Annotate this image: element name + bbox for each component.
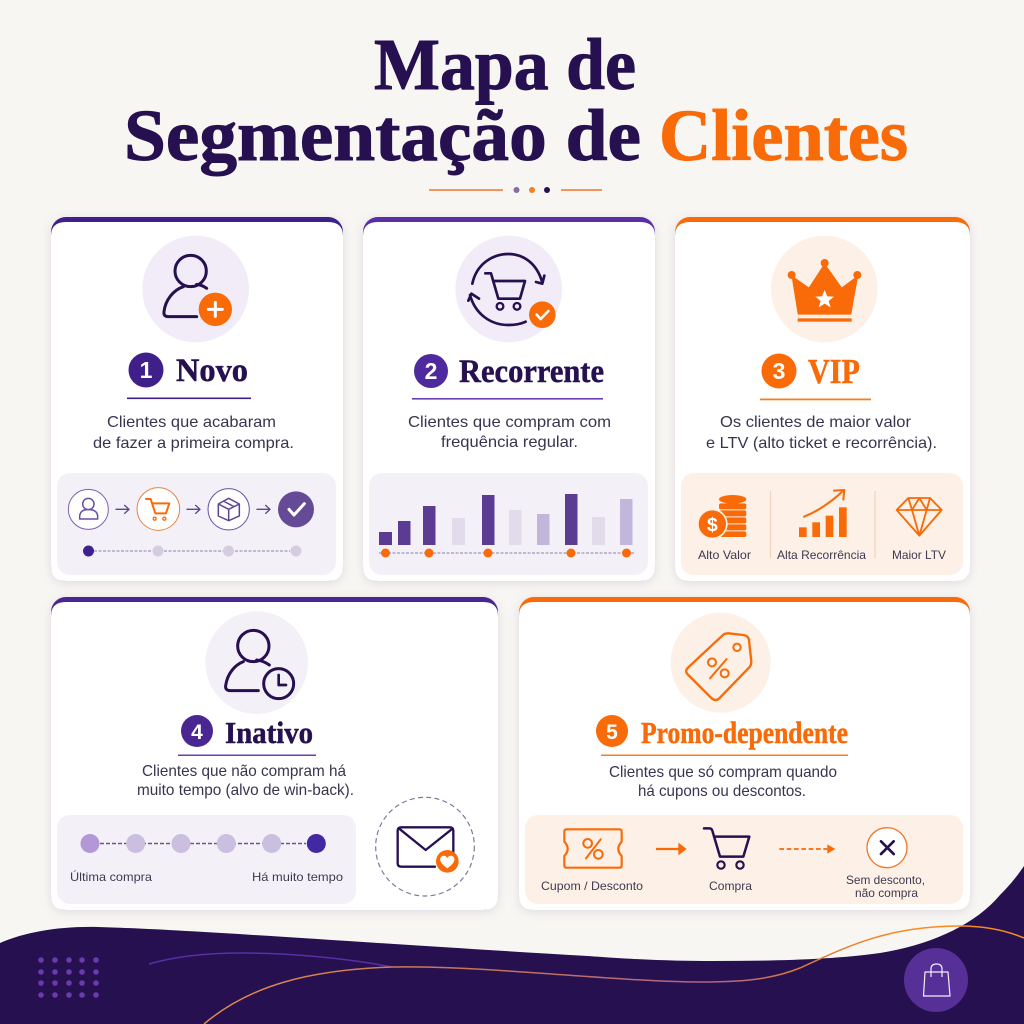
number badge 1 <box>128 352 164 388</box>
panel: recorrente <box>363 217 655 581</box>
panel: vip <box>675 217 970 581</box>
card base <box>519 597 970 910</box>
description: Os clientes de maior valor <box>720 414 912 431</box>
icon: diamond <box>897 498 942 536</box>
panel: novo <box>51 217 343 581</box>
title <box>124 24 908 176</box>
label: Compra <box>709 879 752 893</box>
description: Clientes que compram com <box>408 414 611 431</box>
number badge 1: 1 <box>140 357 153 383</box>
timeline panel: Há muito tempo <box>252 870 343 884</box>
card base <box>363 217 655 581</box>
icon: box step <box>208 489 249 530</box>
icon: coins <box>697 495 746 539</box>
journey panel <box>57 473 336 575</box>
description <box>137 763 354 799</box>
heading: promo-dependente: Promo-dependente <box>641 715 848 750</box>
arrows <box>116 505 270 513</box>
description <box>93 414 294 452</box>
icon: crown <box>771 236 878 342</box>
icon: customer step <box>68 489 108 529</box>
heading: inativo: Inativo <box>225 715 313 750</box>
footer wave <box>0 866 1024 1024</box>
title: Segmentação de <box>124 95 641 176</box>
number badge 3 <box>762 354 796 388</box>
number badge 3: 3 <box>773 358 785 384</box>
label: Alto Valor <box>698 548 751 562</box>
description: muito tempo (alvo de win-back). <box>137 782 354 799</box>
icon: cart <box>704 828 749 869</box>
label: Cupom / Desconto <box>541 879 643 893</box>
vip attributes <box>681 473 963 575</box>
panel: promo-dependente <box>519 597 970 910</box>
icon: new customer <box>142 236 249 342</box>
description <box>609 764 837 800</box>
card base <box>51 217 343 581</box>
panel: inativo <box>51 597 498 910</box>
description: frequência regular. <box>441 434 578 451</box>
label: Alta Recorrência <box>777 548 866 562</box>
number badge 5: 5 <box>606 721 618 744</box>
icon: coupon <box>564 829 622 868</box>
icon: win-back email <box>376 797 474 896</box>
icon: cart step <box>137 488 180 530</box>
number badge 5 <box>596 715 628 747</box>
number badge 2: 2 <box>425 358 437 384</box>
label <box>846 873 925 900</box>
heading: novo: Novo <box>176 353 248 389</box>
icon: rising bars <box>799 490 847 537</box>
label: não compra <box>855 886 918 900</box>
description: há cupons ou descontos. <box>638 783 806 800</box>
timeline panel: Última compra <box>70 869 152 884</box>
label: Maior LTV <box>892 548 946 562</box>
label: Sem desconto, <box>846 873 925 887</box>
description <box>408 414 611 451</box>
dot grid <box>38 957 99 998</box>
icon: check step <box>278 491 314 527</box>
icon: discount tag <box>671 613 771 713</box>
dashed arrow <box>779 844 835 854</box>
description: de fazer a primeira compra. <box>93 435 294 452</box>
bar chart <box>369 473 648 575</box>
card base <box>675 217 970 581</box>
heading: recorrente: Recorrente <box>459 354 604 390</box>
icon: coins: $ <box>707 515 718 536</box>
number badge 4: 4 <box>191 721 203 744</box>
number badge 4 <box>181 715 213 747</box>
description: Clientes que acabaram <box>107 414 276 431</box>
card base <box>51 597 498 910</box>
timeline panel <box>57 815 356 904</box>
description: Clientes que não compram há <box>142 763 346 780</box>
title: Clientes <box>659 95 908 176</box>
arrow <box>656 843 687 855</box>
title ornament <box>429 187 602 193</box>
coupon flow panel <box>525 815 963 904</box>
heading: vip: VIP <box>808 352 860 391</box>
description: Clientes que só compram quando <box>609 764 837 781</box>
description <box>706 414 937 452</box>
number badge 2 <box>414 354 448 388</box>
title: Mapa de <box>374 24 636 105</box>
icon: recurring cart <box>455 236 562 342</box>
icon: inactive customer <box>205 611 308 714</box>
description: e LTV (alto ticket e recorrência). <box>706 435 937 452</box>
icon: shopping bag <box>904 948 968 1012</box>
icon: no purchase <box>867 828 907 868</box>
